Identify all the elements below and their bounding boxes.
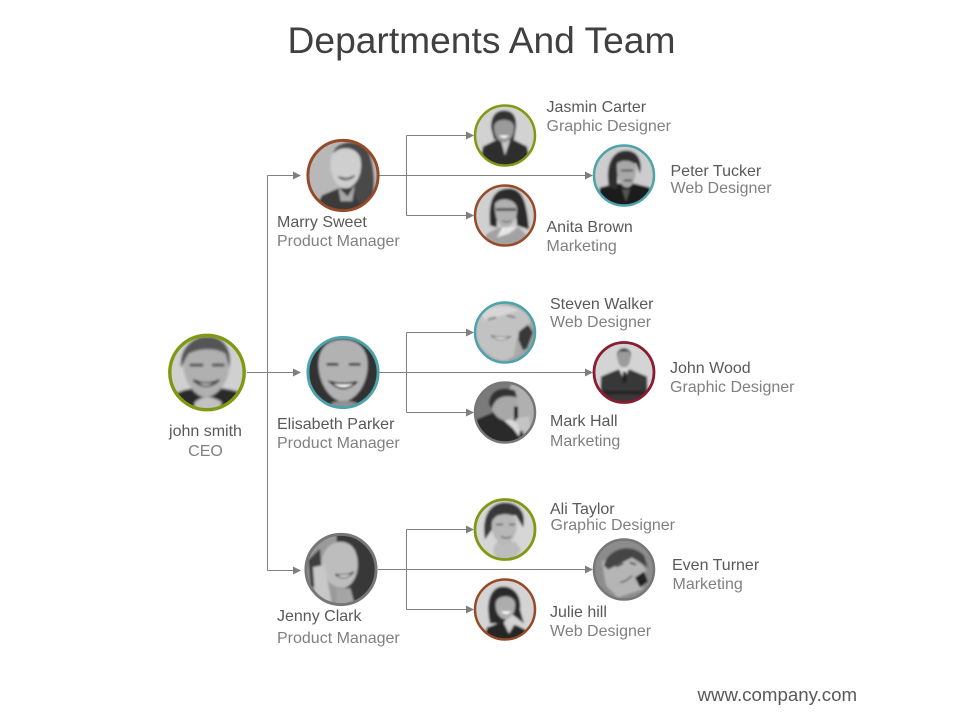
portrait: Mark Hall [474, 382, 536, 444]
portrait: Anita Brown [474, 184, 536, 246]
label: Peter Tucker: Peter Tucker [670, 163, 762, 180]
label: Jenny Clark [277, 608, 400, 647]
website footer: www.company.com [696, 684, 857, 705]
label: Steven Walker [550, 296, 654, 331]
label: Anita Brown: Marketing [546, 238, 617, 255]
label: Marry Sweet: Product Manager [277, 233, 400, 250]
label: john smith: CEO [188, 443, 223, 460]
label: Marry Sweet: Marry Sweet [277, 214, 367, 231]
portrait: john smith [169, 334, 245, 411]
label: Ali Taylor: Ali Taylor [550, 501, 615, 518]
label: Mark Hall: Marketing [550, 433, 620, 450]
label: john smith: john smith [168, 423, 242, 440]
portrait: Jasmin Carter [474, 104, 536, 166]
label: Ali Taylor: Graphic Designer [550, 517, 676, 534]
portrait: Marry Sweet [307, 139, 379, 212]
label: Even Turner [672, 557, 760, 593]
label: Even Turner: Marketing [672, 576, 743, 593]
label: Mark Hall [550, 413, 620, 450]
label: Mark Hall: Mark Hall [550, 413, 618, 430]
portrait: Peter Tucker [593, 144, 655, 206]
portrait: John Wood [593, 342, 655, 404]
label: Elisabeth Parker: Elisabeth Parker [277, 416, 395, 433]
label: Julie hill [550, 604, 652, 640]
portrait: Jenny Clark [305, 533, 377, 606]
portrait: Steven Walker [474, 302, 536, 364]
label: Julie hill: Web Designer [550, 623, 652, 640]
label: Jasmin Carter [546, 99, 672, 135]
label: Julie hill: Julie hill [550, 604, 607, 621]
label: Peter Tucker: Web Designer [670, 180, 772, 197]
label: John Wood: John Wood [670, 360, 751, 377]
label: Ali Taylor [550, 501, 676, 534]
connector lines [247, 136, 586, 610]
label: Steven Walker: Steven Walker [550, 296, 654, 313]
label: Jenny Clark: Product Manager [277, 630, 400, 647]
label: Elisabeth Parker: Product Manager [277, 435, 400, 452]
portrait: Even Turner [593, 538, 655, 600]
label: Peter Tucker [670, 163, 772, 197]
label: john smith [168, 423, 242, 460]
label: Jasmin Carter: Jasmin Carter [546, 99, 647, 116]
label: Even Turner: Even Turner [672, 557, 760, 574]
arrowheads [293, 132, 593, 614]
label: Anita Brown [546, 219, 633, 255]
label: Steven Walker: Web Designer [550, 314, 652, 331]
label: John Wood [670, 360, 795, 396]
portrait: Ali Taylor [474, 498, 536, 560]
portrait: Julie hill [474, 578, 536, 640]
title: Departments And Team [288, 19, 675, 61]
label: John Wood: Graphic Designer [670, 379, 795, 396]
label: Jenny Clark: Jenny Clark [277, 608, 362, 625]
label: Marry Sweet [277, 214, 400, 250]
label: Jasmin Carter: Graphic Designer [546, 118, 672, 135]
label: Anita Brown: Anita Brown [546, 219, 633, 236]
portrait: Elisabeth Parker [307, 336, 379, 409]
label: Elisabeth Parker [277, 416, 400, 452]
